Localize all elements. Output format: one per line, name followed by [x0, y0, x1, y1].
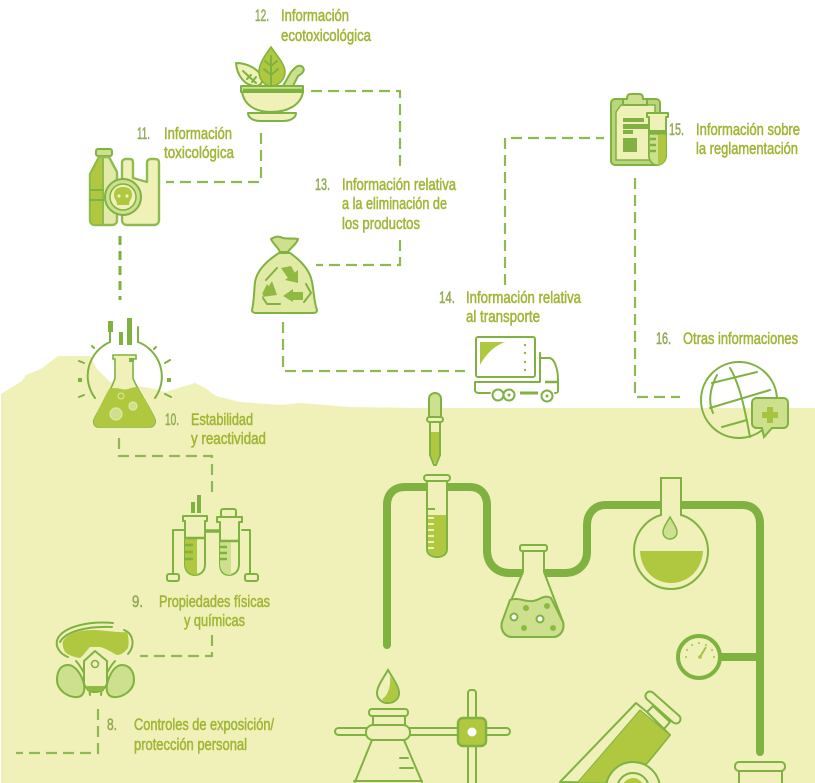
icon: mortar with herbs	[236, 47, 304, 121]
label 9: Propiedades físicas	[159, 593, 270, 611]
label 9: y químicas	[184, 612, 245, 630]
label 14: 14.	[439, 289, 455, 307]
icon: delivery truck	[475, 337, 558, 402]
connector: 11 to 10	[118, 236, 122, 300]
icon: pressure gauge	[678, 636, 720, 678]
label 8	[107, 716, 274, 754]
icon: globe with medical speech bubble	[701, 362, 788, 438]
label 12: ecotoxicológica	[281, 27, 372, 45]
label 11: toxicológica	[164, 144, 235, 162]
label 15: 15.	[669, 121, 684, 139]
label 13: a la eliminación de	[342, 195, 447, 213]
apparatus pipework	[387, 487, 760, 752]
label 8: Controles de exposición/	[134, 716, 274, 734]
label 10	[165, 411, 266, 448]
icon: reacting flask	[78, 318, 171, 427]
connector: 12 to 11	[166, 133, 261, 182]
icon: graduated tube	[424, 475, 450, 557]
icon: recycling bag	[252, 237, 317, 313]
connector: 10 to 9	[119, 438, 212, 492]
label 12: 12.	[255, 7, 269, 25]
label 8: protección personal	[134, 736, 247, 754]
label 12	[255, 7, 372, 45]
icon: dropper	[427, 393, 443, 465]
label 11: 11.	[137, 125, 150, 143]
connector: mask to previous step	[16, 709, 98, 753]
icon: vessel at lower right	[735, 762, 785, 783]
connector: clipboard to globe	[635, 178, 680, 397]
label 14: Información relativa	[466, 289, 582, 307]
icon: toxic bottle and bag	[90, 149, 159, 225]
label 10: 10.	[165, 411, 179, 429]
label 8: 8.	[107, 716, 117, 734]
label 15	[669, 121, 800, 158]
icon: burner flask on clamp stand	[335, 670, 510, 783]
connector: truck to clipboard	[505, 138, 604, 285]
label 14	[439, 289, 582, 326]
icon: clipboard and test tube	[611, 94, 668, 165]
connector: bag to truck	[283, 322, 465, 371]
label 10: Estabilidad	[191, 411, 253, 429]
label 16: 16.	[656, 330, 671, 348]
icon: microscope	[560, 696, 676, 783]
label 9: 9.	[132, 593, 143, 611]
connector: 9 to mask	[140, 635, 212, 656]
label 14: al transporte	[466, 308, 540, 326]
icon: round flask	[634, 478, 708, 589]
icon: bubbling flask	[502, 545, 563, 637]
connector: 13 to bag	[316, 240, 400, 265]
label 13	[315, 176, 457, 233]
ground background	[1, 356, 815, 783]
label 13: los productos	[342, 215, 420, 233]
icon: gas mask and goggles	[57, 623, 134, 697]
connector: 12 to 13	[311, 91, 400, 172]
label 12: Información	[281, 7, 349, 25]
icon: twin test tubes	[167, 495, 258, 581]
label 11: Información	[164, 125, 232, 143]
label 9	[132, 593, 270, 630]
label 13: Información relativa	[342, 176, 457, 194]
label 11	[137, 125, 235, 162]
label 13: 13.	[315, 176, 330, 194]
label 10: y reactividad	[191, 430, 266, 448]
